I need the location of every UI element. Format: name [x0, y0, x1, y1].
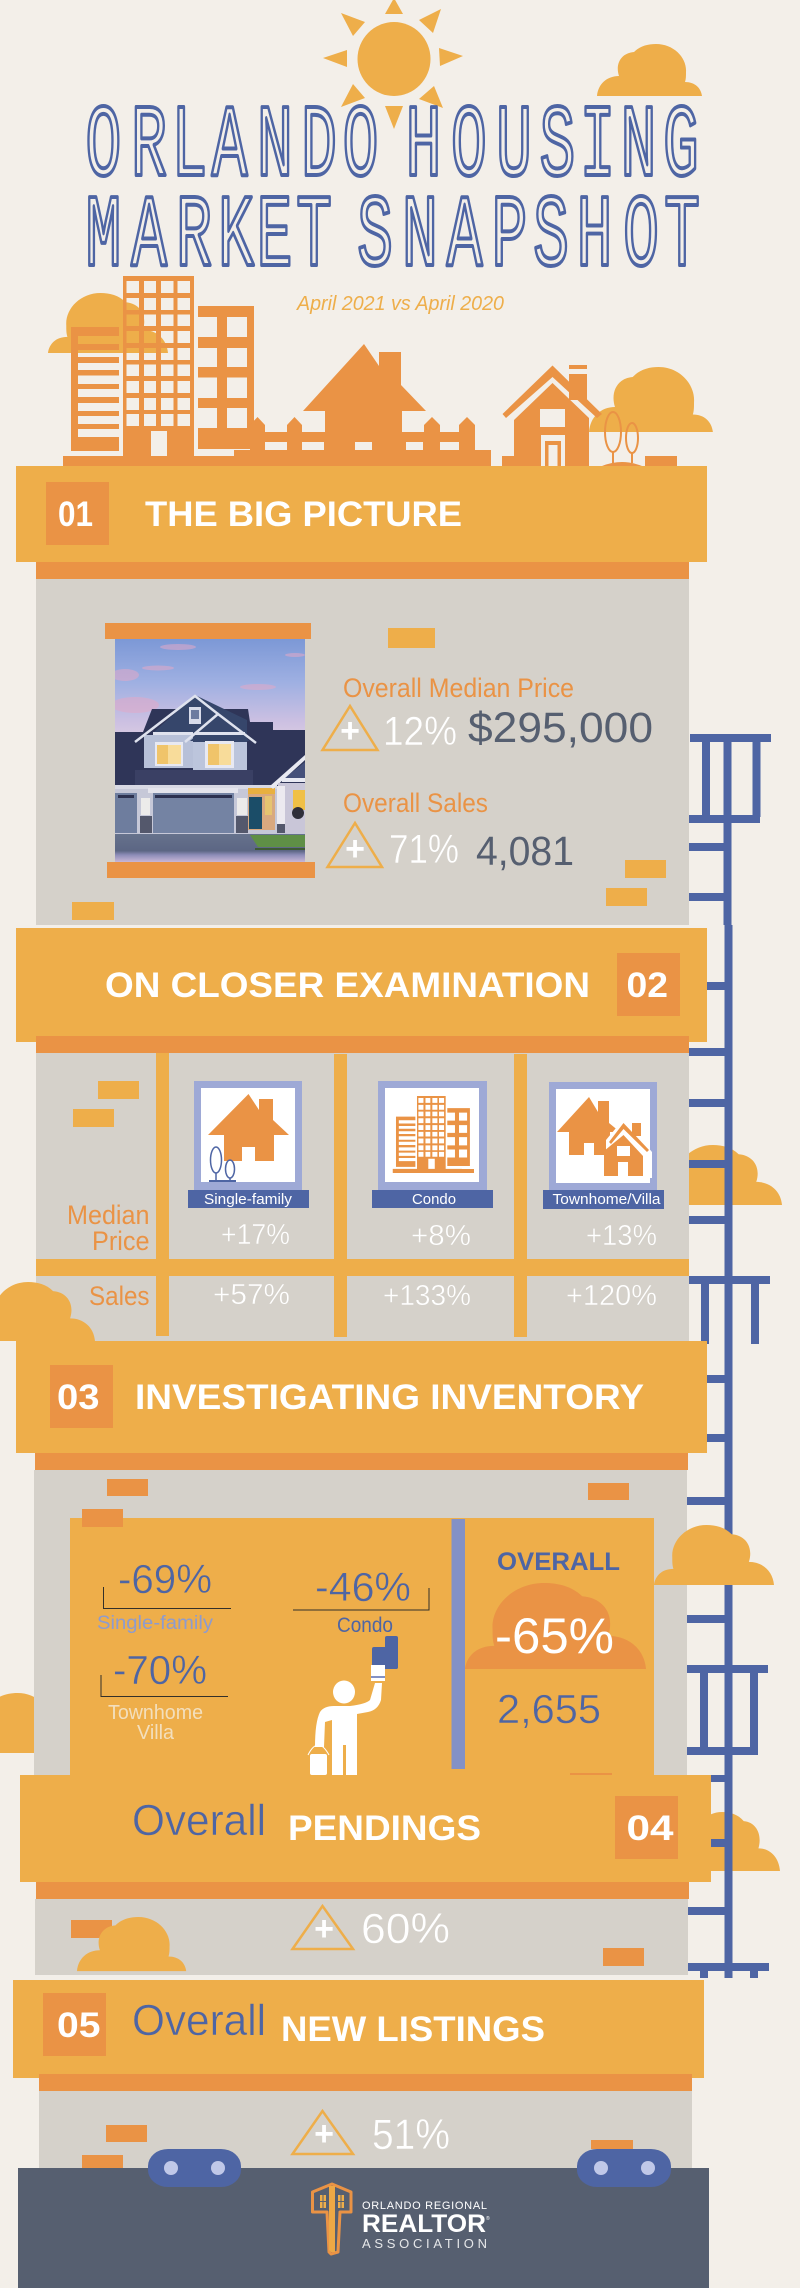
table values: +17% [221, 1219, 290, 1251]
table values: +120% [566, 1280, 657, 1312]
band: 03 investigating inventory: 03 [57, 1378, 100, 1417]
stat: overall median price: + [340, 712, 360, 750]
row labels: Sales [89, 1281, 150, 1311]
icon: cloud behind towers [48, 293, 168, 353]
band: 04 overall pendings [20, 1775, 711, 1899]
icon: cloud behind small house [589, 367, 713, 432]
row labels: Price [92, 1226, 150, 1256]
stat: townhome villa: -70% [113, 1647, 207, 1693]
small house [514, 383, 589, 466]
stat: overall: 2,655 [497, 1686, 601, 1732]
window: single-family: Single-family [204, 1191, 292, 1208]
panel: the big picture [36, 562, 689, 925]
band: 02 on closer examination: ON CLOSER EXAMINATION [105, 966, 590, 1005]
icon: painter [308, 1636, 398, 1775]
stat: townhome villa: Villa [137, 1722, 175, 1744]
table values [213, 1219, 657, 1312]
footer [18, 2149, 709, 2288]
band: 05 overall new listings: 05 [57, 2006, 100, 2045]
title: ORLANDO HOUSING [86, 91, 699, 207]
title [86, 91, 700, 297]
window: townhome/villa: Townhome/Villa [552, 1191, 661, 1208]
stat: townhome villa: Townhome [108, 1702, 203, 1724]
stat: single-family [97, 1556, 231, 1634]
towers [63, 276, 254, 466]
band: 01 the big picture: 01 [58, 495, 93, 534]
window: townhome/villa [543, 1082, 664, 1209]
icon: sun [323, 0, 463, 129]
stat: overall median price: $295,000 [468, 704, 653, 752]
panel: overall pendings: + [314, 1910, 334, 1948]
stat: overall sales [328, 788, 574, 874]
band: 04 overall pendings: Overall [132, 1796, 266, 1845]
window frame with house photo [105, 623, 315, 878]
main house [303, 344, 426, 442]
stat: overall median price: Overall Median Price [343, 673, 574, 703]
stat: overall median price: 12% [383, 708, 457, 754]
panel: overall pendings: 60% [361, 1905, 450, 1953]
panel: on closer examination [36, 1053, 689, 1341]
title: MARKET SNAPSHOT [86, 181, 700, 297]
band: 05 overall new listings: NEW LISTINGS [281, 2010, 545, 2049]
trees [605, 412, 638, 463]
band: 02 on closer examination [16, 928, 707, 1053]
stat: condo [293, 1564, 429, 1637]
logo wordmark: ASSOCIATION [362, 2236, 487, 2251]
band: 03 investigating inventory: INVESTIGATING INVENTORY [135, 1378, 644, 1417]
panel: overall new listings: 51% [372, 2111, 450, 2159]
icon: cloud at left edge [0, 1693, 70, 1753]
stat: overall: -65% [495, 1608, 614, 1664]
icon: cloud over left panel edge [0, 1282, 95, 1341]
stat: overall: OVERALL [497, 1548, 620, 1576]
band: 03 investigating inventory [16, 1341, 707, 1470]
icon: cloud right of inventory [654, 1525, 774, 1585]
stat: overall [465, 1548, 646, 1732]
band: 01 the big picture: THE BIG PICTURE [145, 495, 462, 534]
window: single-family [188, 1081, 309, 1208]
stat: overall median price [322, 673, 653, 754]
stat: condo: Condo [337, 1614, 393, 1637]
stat: overall sales: 4,081 [476, 828, 574, 874]
subtitle: April 2021 vs April 2020 [296, 293, 504, 315]
skyline [63, 276, 677, 466]
logo wordmark: ORLANDO REGIONAL [362, 2200, 487, 2212]
stat: single-family: Single-family [97, 1613, 214, 1634]
logo key [312, 2184, 351, 2254]
table values: +57% [213, 1279, 290, 1311]
panel: overall new listings [39, 2091, 692, 2168]
panel: investigating inventory [34, 1470, 687, 1776]
stat: overall sales: + [345, 830, 365, 868]
window: condo: Condo [412, 1191, 456, 1208]
logo wordmark: ® [486, 2215, 490, 2222]
table values: +133% [383, 1280, 471, 1312]
panel: overall new listings: + [314, 2115, 334, 2153]
stat: townhome villa [101, 1647, 228, 1744]
band: 04 overall pendings: PENDINGS [288, 1809, 481, 1848]
stat: condo: -46% [315, 1564, 411, 1610]
logo wordmark [362, 2200, 490, 2251]
fire escape ladder [686, 734, 771, 1978]
panel: overall pendings [35, 1899, 688, 1975]
icon: cloud top right [597, 44, 702, 96]
logo wordmark: REALTOR [362, 2210, 486, 2238]
icon: cloud behind ladder [659, 1145, 782, 1205]
row labels: Median [67, 1200, 150, 1230]
wheel left [148, 2149, 241, 2187]
row labels [67, 1200, 150, 1311]
window: condo [372, 1081, 493, 1208]
icon: cloud behind band four [677, 1812, 780, 1871]
band: 01 the big picture [16, 466, 707, 562]
band: 05 overall new listings: Overall [132, 1996, 266, 2045]
table values: +8% [411, 1220, 471, 1252]
fence [250, 417, 475, 450]
table values: +13% [586, 1220, 657, 1252]
band: 05 overall new listings [13, 1980, 704, 2091]
stat: single-family: -69% [118, 1556, 212, 1602]
wheel right [577, 2149, 671, 2187]
band: 04 overall pendings: 04 [626, 1809, 674, 1848]
band: 02 on closer examination: 02 [626, 966, 668, 1005]
stat: overall sales: Overall Sales [343, 788, 488, 818]
stat: overall sales: 71% [389, 826, 459, 872]
